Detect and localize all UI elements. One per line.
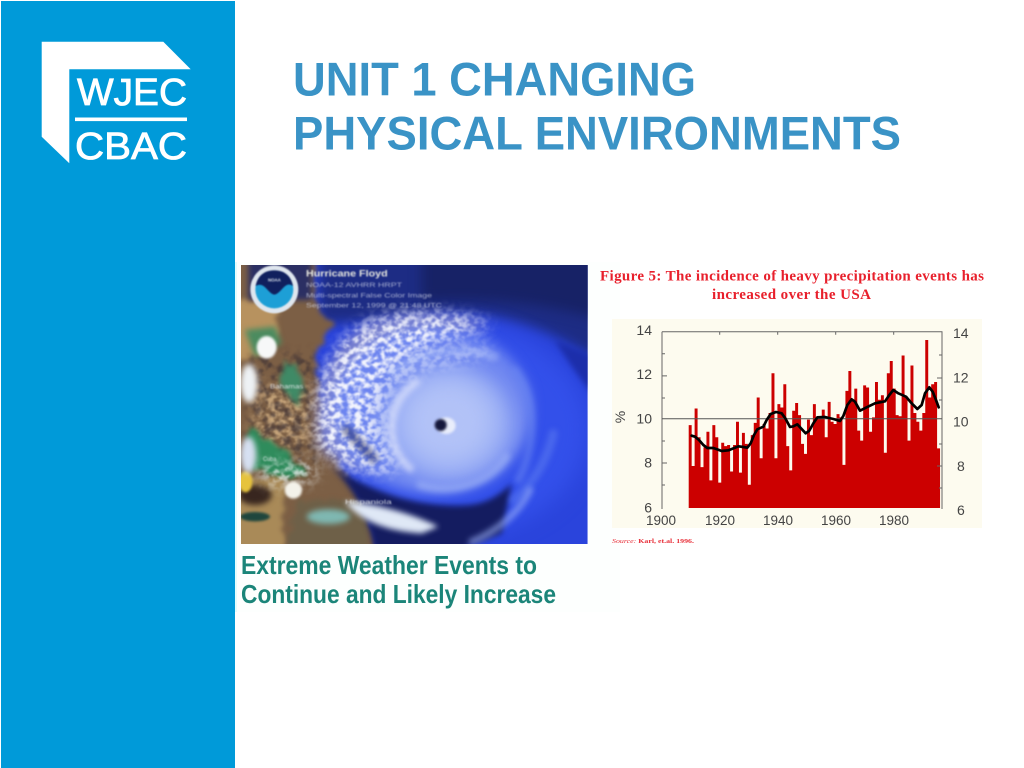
logo: WJEC CBAC: CBAC [75, 126, 187, 168]
logo: WJEC CBAC [42, 42, 191, 168]
year axis labels [646, 513, 909, 528]
title: UNIT 1 CHANGING [293, 52, 696, 106]
inner eyewall cloud disc [383, 365, 513, 482]
figure heading: Figure 5: The incidence of heavy precipitation events has [600, 268, 984, 284]
year axis labels: 1940 [763, 513, 793, 528]
left axis labels: 10 [636, 410, 652, 426]
image caption text: NOAA-12 AVHRR HRPT [306, 282, 402, 289]
year axis labels: 1900 [646, 513, 676, 528]
map labels: Cuba [263, 457, 277, 463]
dark band beneath storm [332, 467, 512, 553]
figure heading: increased over the USA [712, 287, 871, 303]
title: PHYSICAL ENVIRONMENTS [293, 106, 901, 160]
right axis labels: 14 [953, 325, 969, 341]
left axis labels: 8 [644, 454, 652, 470]
map labels [263, 385, 393, 506]
left axis labels: 14 [636, 322, 652, 338]
y-axis unit: % [612, 411, 628, 423]
icon: NOAA logo [250, 265, 298, 313]
right axis labels: 12 [953, 370, 969, 386]
year axis labels: 1980 [879, 513, 909, 528]
caption: extreme weather: Extreme Weather Events to [241, 550, 537, 580]
right axis labels: 6 [957, 502, 965, 518]
source note: Source: Karl, et.al. 1996. [612, 538, 694, 545]
satellite image: Hurricane Floyd [241, 265, 588, 544]
image caption text [306, 269, 442, 309]
panel: hurricane satellite image with caption [235, 262, 588, 612]
axes and reference line [662, 332, 942, 509]
logo: WJEC CBAC: WJEC [77, 72, 187, 114]
caption: extreme weather [241, 550, 556, 609]
image caption text: Multi-spectral False Color Image [306, 292, 432, 299]
image caption text: Hurricane Floyd [306, 269, 388, 279]
smoothed trend line [692, 387, 939, 451]
feathered cloud shield [317, 314, 492, 471]
right axis labels: 8 [957, 458, 965, 474]
title [293, 52, 901, 160]
right axis labels [953, 325, 969, 518]
left axis labels [636, 322, 652, 516]
hurricane eye [435, 417, 456, 434]
left axis labels: 12 [636, 366, 652, 382]
year axis labels: 1920 [705, 513, 735, 528]
year axis labels: 1960 [821, 513, 851, 528]
bars: annual percentage [689, 340, 940, 508]
figure heading [600, 268, 984, 303]
land masses [241, 265, 376, 544]
map labels: Bahamas [270, 385, 303, 391]
panel: precipitation bar chart [612, 319, 982, 528]
caption: extreme weather: Continue and Likely Increase [241, 579, 556, 609]
sidebar panel [1, 1, 235, 768]
icon: NOAA logo: NOAA [268, 277, 282, 282]
image caption text: September 12, 1999 @ 21:48 UTC [306, 302, 442, 309]
right axis labels: 10 [953, 414, 969, 430]
southern cloud bank [345, 502, 438, 533]
left axis labels: 6 [644, 500, 652, 516]
map labels: Hispaniola [345, 500, 393, 506]
